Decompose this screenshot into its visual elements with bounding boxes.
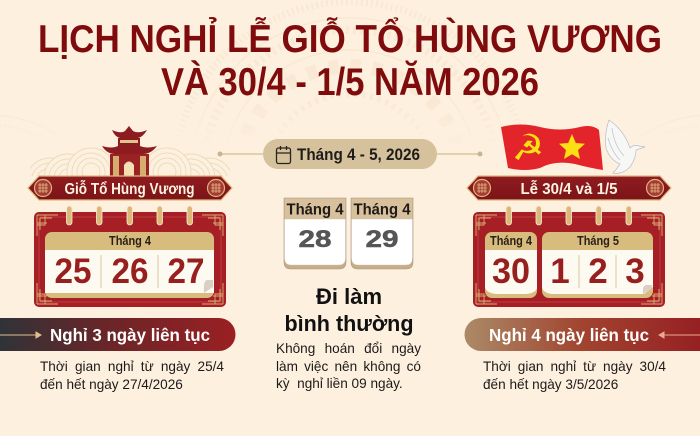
text block: center note: làm việc nên không có (276, 358, 421, 374)
calendar: 29: Tháng 4 (354, 202, 411, 218)
text block: left note: đến hết ngày 27/4/2026 (40, 377, 183, 392)
calendar: 28: 28 (298, 226, 332, 253)
binder rings (506, 206, 632, 225)
text block: left note (40, 359, 224, 392)
calendar: 25 26 27: 27 (168, 252, 204, 291)
banner: nghỉ 4 ngày: Nghỉ 4 ngày liên tục (489, 325, 649, 345)
banner: nghỉ 3 ngày: Nghỉ 3 ngày liên tục (50, 325, 210, 345)
ribbon: Lễ 30/4 và 1/5 (467, 176, 671, 200)
calendar: 25 26 27: 26 (112, 252, 148, 291)
calendar: 29 (351, 198, 413, 269)
title: VÀ 30/4 - 1/5 NĂM 2026 (161, 60, 539, 104)
icon: star (559, 134, 585, 159)
calendar: 28: Tháng 4 (286, 202, 344, 218)
binder rings (66, 206, 192, 225)
ribbon: Giỗ Tổ Hùng Vương (28, 176, 232, 200)
ribbon: Lễ 30/4 và 1/5: Lễ 30/4 và 1/5 (520, 181, 618, 198)
april sheet (485, 232, 537, 298)
text block: right note (483, 359, 666, 392)
arrow (0, 332, 41, 338)
heading: đi làm bình thường: bình thường (284, 311, 414, 336)
may sheet (542, 232, 653, 298)
date pill with connector: Tháng 4 - 5, 2026 (297, 145, 420, 164)
banner: nghỉ 3 ngày (0, 318, 236, 351)
may sheet: 3 (625, 252, 645, 291)
may sheet: Tháng 5 (577, 234, 619, 248)
text block: left note: Thời gian nghỉ từ ngày 25/4 (40, 359, 224, 374)
arrow (659, 332, 700, 338)
calendar: 30 1 2 3 (473, 206, 665, 307)
calendar: 25 26 27: 25 (54, 252, 92, 291)
icon: hammer and sickle: ☭ (512, 128, 544, 169)
text block: right note: đến hết ngày 3/5/2026 (483, 377, 618, 392)
icon: flag (501, 124, 603, 170)
text block: center note: Không hoán đổi ngày (276, 341, 421, 356)
text block: center note: kỳ nghỉ liền 09 ngày. (276, 376, 403, 391)
heading: đi làm bình thường (284, 284, 414, 336)
icon: calendar (276, 146, 290, 164)
may sheet: 2 (588, 252, 608, 291)
banner: nghỉ 4 ngày (464, 318, 700, 351)
april sheet: Tháng 4 (490, 234, 532, 248)
heading: đi làm bình thường: Đi làm (316, 284, 382, 309)
title (38, 16, 662, 104)
calendar: 25 26 27 (34, 206, 226, 307)
may sheet: 1 (550, 252, 570, 291)
date pill with connector (218, 139, 482, 169)
ribbon: Giỗ Tổ Hùng Vương: Giỗ Tổ Hùng Vương (64, 181, 194, 198)
calendar: 25 26 27: Tháng 4 (109, 234, 151, 248)
icon: temple (30, 126, 230, 176)
april sheet: 30 (492, 252, 530, 291)
icon: dove (605, 120, 645, 173)
calendar: 28 (284, 198, 346, 269)
text block: right note: Thời gian nghỉ từ ngày 30/4 (483, 359, 666, 374)
calendar: 29: 29 (366, 226, 398, 253)
text block: center note (276, 341, 421, 391)
